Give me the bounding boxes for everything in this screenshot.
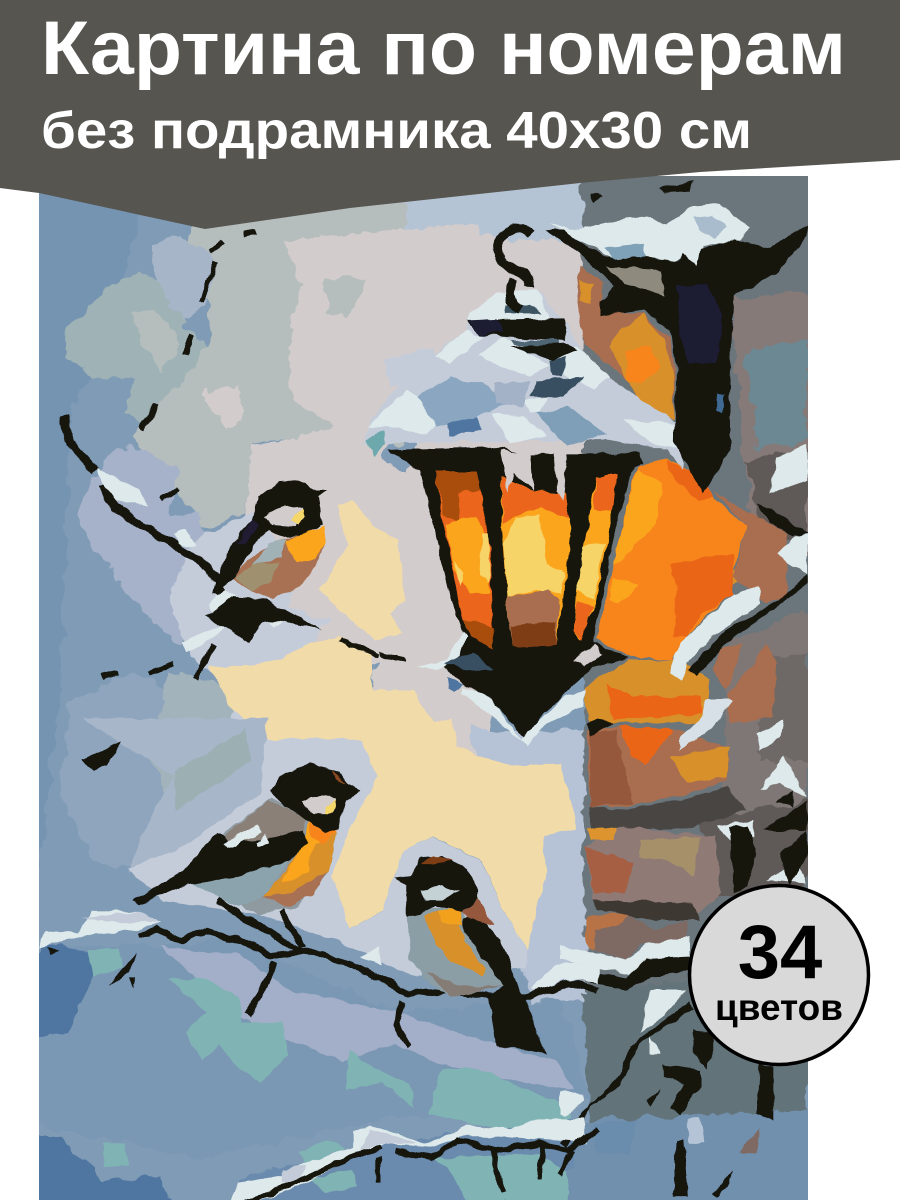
title: Картина по номерам [41,6,846,91]
brick wall column [560,170,820,1200]
lower brick block [585,827,720,960]
badge: 34 colours [690,886,868,1064]
right snow and branches [670,443,808,830]
lantern pane left [435,472,493,648]
left bird head [271,764,360,833]
branch: upper left [64,417,219,580]
top bird with branch [64,232,379,678]
snow under lantern [462,687,585,747]
header banner [0,0,900,229]
pale cream patch upper [320,500,405,640]
snow on lower left branch [39,911,160,947]
orange wall glow near bracket [577,267,675,420]
lantern frame [387,447,643,742]
lantern body [380,447,643,747]
painting: winter birds and lantern [20,160,820,1200]
top bird body [232,527,326,600]
right bird head [396,856,478,918]
painting background [20,160,820,1200]
snow on upper branch [97,468,149,507]
lantern pane right [573,473,617,640]
lavender halo and teal patches lower [82,719,599,1200]
left bird body [223,798,337,916]
snow on wall top [550,182,750,270]
lantern pane centre [502,477,572,647]
icicles [500,450,533,493]
lantern roof with snow [363,290,683,470]
main branch [139,901,599,1047]
badge: 34 colours: цветов [715,987,843,1028]
subtitle: без подрамника 40х30 см [41,102,752,160]
top bird cheek [262,507,306,527]
pale cream glow [209,636,578,950]
badge: 34 colours: 34 [738,910,822,995]
lantern hook and bracket [467,225,808,493]
branch fragments [206,597,322,643]
lower right branches and snow [560,820,807,1197]
lower branch [228,1129,599,1200]
right bird body [407,908,503,997]
lower branches, birds [39,742,599,1200]
bricks and wall glow around lantern [583,458,787,830]
